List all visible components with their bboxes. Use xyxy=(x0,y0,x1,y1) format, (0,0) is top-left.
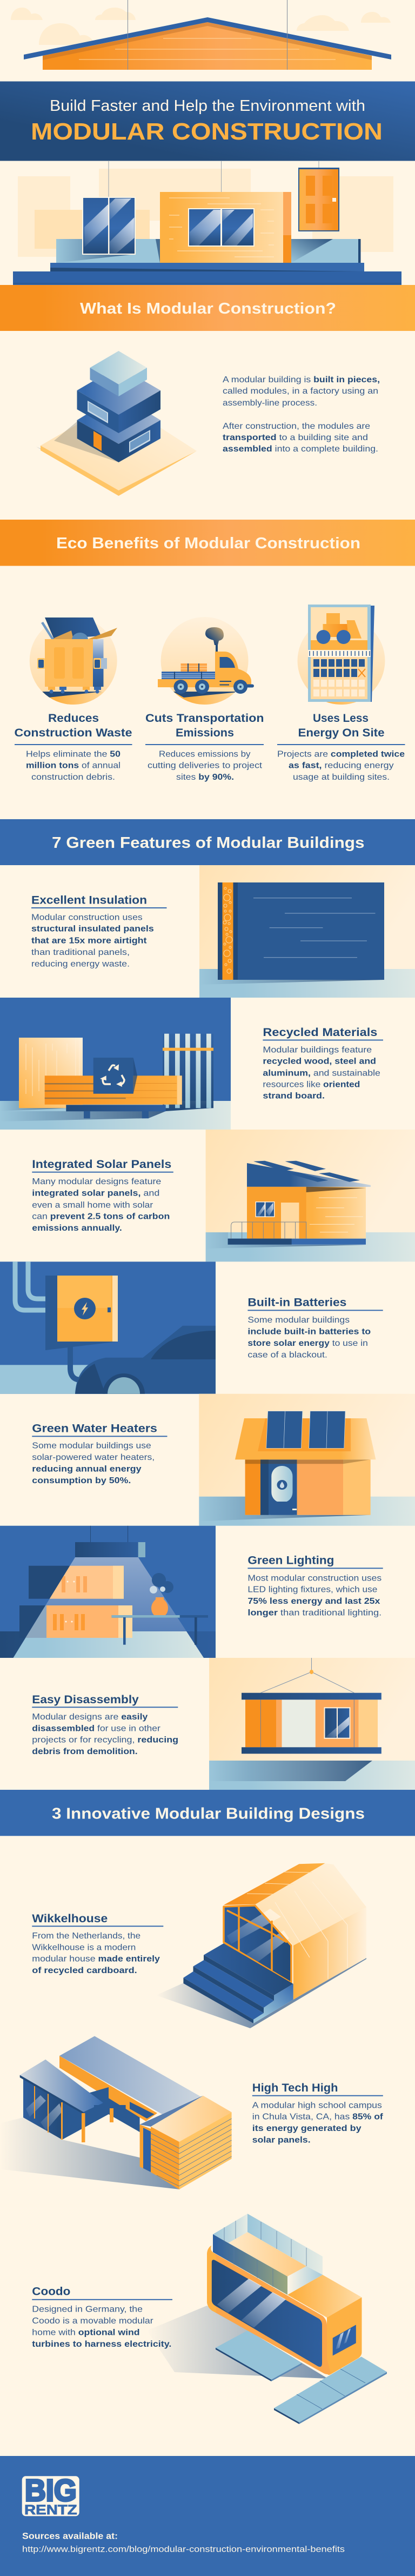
feature: built-in batteries text: Some modular buildings xyxy=(247,1316,350,1325)
illustration: hero roof xyxy=(11,0,391,70)
section banner: eco benefits xyxy=(0,520,415,566)
side window xyxy=(333,2325,356,2355)
middle window xyxy=(88,401,108,423)
battery box xyxy=(57,1276,118,1342)
footer xyxy=(0,2456,415,2576)
railing xyxy=(231,1222,306,1239)
walkway plates xyxy=(274,2356,387,2424)
light beam scene xyxy=(13,1557,204,1658)
text: wikkelhouse: Wikkelhouse xyxy=(32,1913,108,1925)
text: what is modular construction xyxy=(223,375,380,454)
feature: excellent insulation text: Excellent Insulation xyxy=(31,894,147,907)
benefit: uses less energy on site: usage at building sites. xyxy=(293,773,390,782)
right side wall xyxy=(327,2298,362,2375)
house gable wall xyxy=(43,22,372,70)
electric car xyxy=(75,1326,216,1394)
section banner: what is modular construction xyxy=(0,285,415,331)
feature: recycled materials text: Modular buildings feature xyxy=(263,1046,372,1055)
title banner xyxy=(0,81,415,161)
feature: crane lifted module illustration xyxy=(209,1658,415,1790)
left wing walls xyxy=(23,2078,109,2140)
text: wikkelhouse: Wikkelhouse is a modern xyxy=(32,1943,136,1952)
hanging window xyxy=(82,197,136,255)
roof solar panels xyxy=(253,1161,360,1182)
feature: green lighting text: longer than traditional lighting. xyxy=(247,1609,381,1618)
section banner: 7 green features: 7 Green Features of Modular Buildings xyxy=(52,834,364,852)
illustration: coodo house xyxy=(147,2214,387,2424)
platform xyxy=(13,263,401,285)
feature: green water heaters text: solar-powered water heaters, xyxy=(32,1453,155,1462)
text: what is modular construction: assembled into a complete building. xyxy=(223,444,378,454)
text: wikkelhouse: of recycled cardboard. xyxy=(32,1966,137,1975)
feature: recycled materials illustration xyxy=(0,998,231,1130)
text: high tech high: High Tech High xyxy=(252,2082,338,2094)
house walls xyxy=(247,1187,306,1239)
text: what is modular construction: called modules, in a factory using an xyxy=(223,387,378,396)
lamp xyxy=(75,1542,145,1557)
feature: water heater house illustration xyxy=(199,1394,415,1526)
table xyxy=(112,1615,208,1645)
title banner: Build Faster and Help the Environment with xyxy=(50,97,365,115)
feature: green lighting text xyxy=(247,1555,383,1618)
feature: recycled materials text: strand board. xyxy=(263,1092,325,1101)
text: high tech high: A modular high school campus xyxy=(252,2101,382,2110)
glass upper storey xyxy=(213,2214,323,2295)
logo: BigRentz: BIG xyxy=(25,2473,77,2508)
feature: green water heaters text xyxy=(32,1423,167,1485)
middle block xyxy=(77,366,160,415)
title banner: MODULAR CONSTRUCTION xyxy=(31,118,383,145)
feature: integrated solar panels text: integrated solar panels, and xyxy=(32,1189,159,1198)
plant in vase xyxy=(150,1573,173,1615)
benefit: cuts transportation emissions: Cuts Transportation xyxy=(145,712,264,725)
benefit: cuts transportation emissions: sites by 90%. xyxy=(176,773,234,782)
feature: integrated solar panels text: Many modular designs feature xyxy=(32,1177,161,1186)
feature: green lighting text: LED lighting fixtures, which use xyxy=(247,1585,378,1595)
text: high tech high: solar panels. xyxy=(252,2136,311,2145)
text: coodo: Designed in Germany, the xyxy=(32,2305,143,2314)
feature: easy disassembly text xyxy=(32,1694,178,1756)
text: what is modular construction: After construction, the modules are xyxy=(223,422,370,431)
benefit: reduces construction waste: Construction Waste xyxy=(14,727,132,739)
clouds xyxy=(11,8,391,45)
striped end block xyxy=(140,2096,232,2189)
feature: green water heaters text: consumption by 50%. xyxy=(32,1476,131,1485)
feature: excellent insulation text: Modular construction uses xyxy=(31,913,143,922)
illustration: wikkelhouse xyxy=(156,1863,366,2028)
illustration: hero module assembly xyxy=(13,161,401,285)
text: high tech high xyxy=(252,2082,384,2145)
feature: built-in batteries text: Built-in Batteries xyxy=(247,1297,346,1309)
feature: green lighting illustration xyxy=(0,1526,216,1658)
benefit: cuts transportation emissions: Emissions xyxy=(176,727,234,739)
benefit: reduces construction waste: million tons of annual xyxy=(26,761,121,771)
benefit: reduces construction waste: construction debris. xyxy=(31,773,115,782)
icon: recycling bin xyxy=(93,1058,137,1094)
text: high tech high: in Chula Vista, CA, has 85% of xyxy=(252,2113,384,2122)
lower block xyxy=(77,395,160,444)
orange plank stack xyxy=(45,1075,182,1105)
feature: excellent insulation text: than traditional panels, xyxy=(31,948,130,957)
roof xyxy=(24,17,391,59)
benefit: reduces construction waste xyxy=(14,712,132,782)
sources: http://www.bigrentz.com/blog/modular-construction-environmental-benefits xyxy=(22,2545,345,2554)
sloped roof xyxy=(247,1163,371,1187)
orange door xyxy=(93,431,102,451)
steel bars xyxy=(163,1034,213,1108)
sources xyxy=(22,2531,345,2554)
feature: integrated solar panels text: emissions annually. xyxy=(32,1224,122,1233)
icon: truck xyxy=(158,617,254,705)
feature: easy disassembly text: debris from demolition. xyxy=(32,1747,138,1756)
benefit: uses less energy on site: Energy On Site xyxy=(298,727,385,739)
icon: dumpster xyxy=(29,617,117,705)
feature: integrated solar panels text xyxy=(32,1158,173,1233)
module beams xyxy=(242,1693,381,1754)
icon: calendar xyxy=(297,605,385,705)
lower window xyxy=(129,430,150,453)
text: wikkelhouse: modular house made entirely xyxy=(32,1955,160,1964)
illustration: high tech high campus xyxy=(0,2036,232,2189)
feature: easy disassembly text: Easy Disassembly xyxy=(32,1694,139,1706)
water heater tank xyxy=(270,1466,297,1515)
benefit: cuts transportation emissions: cutting deliveries to project xyxy=(148,761,263,771)
text: coodo: Coodo xyxy=(32,2286,70,2298)
section banner: what is modular construction: What Is Modular Construction? xyxy=(80,300,336,317)
feature: excellent insulation text: structural insulated panels xyxy=(31,925,154,934)
power lines xyxy=(15,1262,57,1310)
text: wikkelhouse: From the Netherlands, the xyxy=(32,1931,140,1941)
feature: recycled materials text: recycled wood, steel and xyxy=(263,1057,376,1066)
front frame xyxy=(207,2246,331,2374)
left wing roof xyxy=(20,2060,103,2112)
logo: BigRentz: RENTZ xyxy=(24,2502,77,2518)
text: what is modular construction: A modular building is built in pieces, xyxy=(223,375,380,384)
feature: easy disassembly text: disassembled for use in other xyxy=(32,1724,161,1733)
feature: easy disassembly text: projects or for recycling, reducing xyxy=(32,1736,178,1745)
benefit: cuts transportation emissions xyxy=(145,712,264,782)
text: what is modular construction: assembly-line process. xyxy=(223,399,317,408)
feature: built-in batteries text: include built-in batteries to xyxy=(247,1327,371,1336)
illustration: stacked modular building xyxy=(36,351,197,496)
feature: insulated panel illustration xyxy=(199,865,415,998)
section banner: 3 innovative designs: 3 Innovative Modular Building Designs xyxy=(52,1805,365,1822)
feature: green lighting text: 75% less energy and last 25x xyxy=(247,1597,380,1606)
feature: recycled materials text xyxy=(263,1026,383,1101)
section banner: 3 innovative designs xyxy=(0,1790,415,1836)
wall module xyxy=(160,192,291,263)
front glass xyxy=(212,2260,322,2367)
deck xyxy=(228,1239,366,1245)
feature: excellent insulation text: that are 15x more airtight xyxy=(31,936,147,945)
feature: built-in batteries text xyxy=(247,1297,383,1360)
feature: recycled materials text: Recycled Materials xyxy=(263,1026,377,1039)
text: coodo: home with optional wind xyxy=(32,2328,140,2338)
text: what is modular construction: transported to a building site and xyxy=(223,433,368,442)
main wing xyxy=(109,2098,140,2132)
benefit: reduces construction waste: Helps eliminate the 50 xyxy=(26,749,121,759)
section banner: eco benefits: Eco Benefits of Modular Construction xyxy=(56,535,360,552)
feature: green water heaters text: Some modular buildings use xyxy=(32,1442,151,1451)
text: coodo: turbines to harness electricity. xyxy=(32,2340,171,2349)
front steps xyxy=(183,1943,293,2023)
benefit: uses less energy on site xyxy=(277,712,405,782)
house shell xyxy=(224,1863,366,2000)
feature: excellent insulation text: reducing energy waste. xyxy=(31,960,130,969)
module walls xyxy=(245,1699,378,1747)
benefit: uses less energy on site: Projects are completed twice xyxy=(277,749,405,759)
top block xyxy=(90,351,147,384)
feature: recycled materials text: resources like oriented xyxy=(263,1080,360,1090)
feature: green water heaters text: Green Water Heaters xyxy=(32,1423,157,1435)
sources: Sources available at: xyxy=(22,2531,118,2541)
feature: built-in batteries illustration xyxy=(0,1262,216,1394)
feature: recycled materials text: aluminum, and sustainable xyxy=(263,1068,380,1078)
text: coodo xyxy=(32,2286,172,2349)
text: high tech high: its energy generated by xyxy=(252,2124,362,2133)
glass gable xyxy=(224,1906,291,1983)
section banner: 7 green features xyxy=(0,819,415,865)
benefit: uses less energy on site: as fast, reducing energy xyxy=(289,761,393,771)
benefit: uses less energy on site: Uses Less xyxy=(313,712,369,725)
feature: integrated solar panels text: Integrated Solar Panels xyxy=(32,1158,171,1171)
entry plate xyxy=(216,2331,302,2381)
walls xyxy=(245,1459,260,1515)
text: coodo: Coodo is a movable modular xyxy=(32,2316,153,2326)
table xyxy=(66,1105,166,1118)
crane rigging xyxy=(260,1658,354,1693)
feature: easy disassembly text: Modular designs are easily xyxy=(32,1712,148,1722)
hanging door xyxy=(298,168,339,231)
feature: green lighting text: Green Lighting xyxy=(247,1555,334,1567)
text: wikkelhouse xyxy=(32,1913,163,1975)
solar panels xyxy=(266,1411,345,1448)
feature: green water heaters text: reducing annual energy xyxy=(32,1465,142,1474)
wood board xyxy=(19,1038,83,1108)
feature: excellent insulation text xyxy=(31,894,166,969)
feature: solar house illustration xyxy=(206,1130,415,1262)
feature: integrated solar panels text: even a small home with solar xyxy=(32,1200,153,1210)
feature: integrated solar panels text: can prevent 2.5 tons of carbon xyxy=(32,1212,170,1221)
crane cables xyxy=(128,0,287,70)
benefit: cuts transportation emissions: Reduces emissions by xyxy=(159,749,251,759)
feature: built-in batteries text: case of a blackout. xyxy=(247,1351,327,1360)
roof xyxy=(235,1418,376,1459)
feature: green lighting text: Most modular construction uses xyxy=(247,1574,381,1583)
benefit: reduces construction waste: Reduces xyxy=(48,712,99,725)
cables xyxy=(109,161,319,197)
feature: built-in batteries text: store solar energy to use in xyxy=(247,1339,368,1348)
